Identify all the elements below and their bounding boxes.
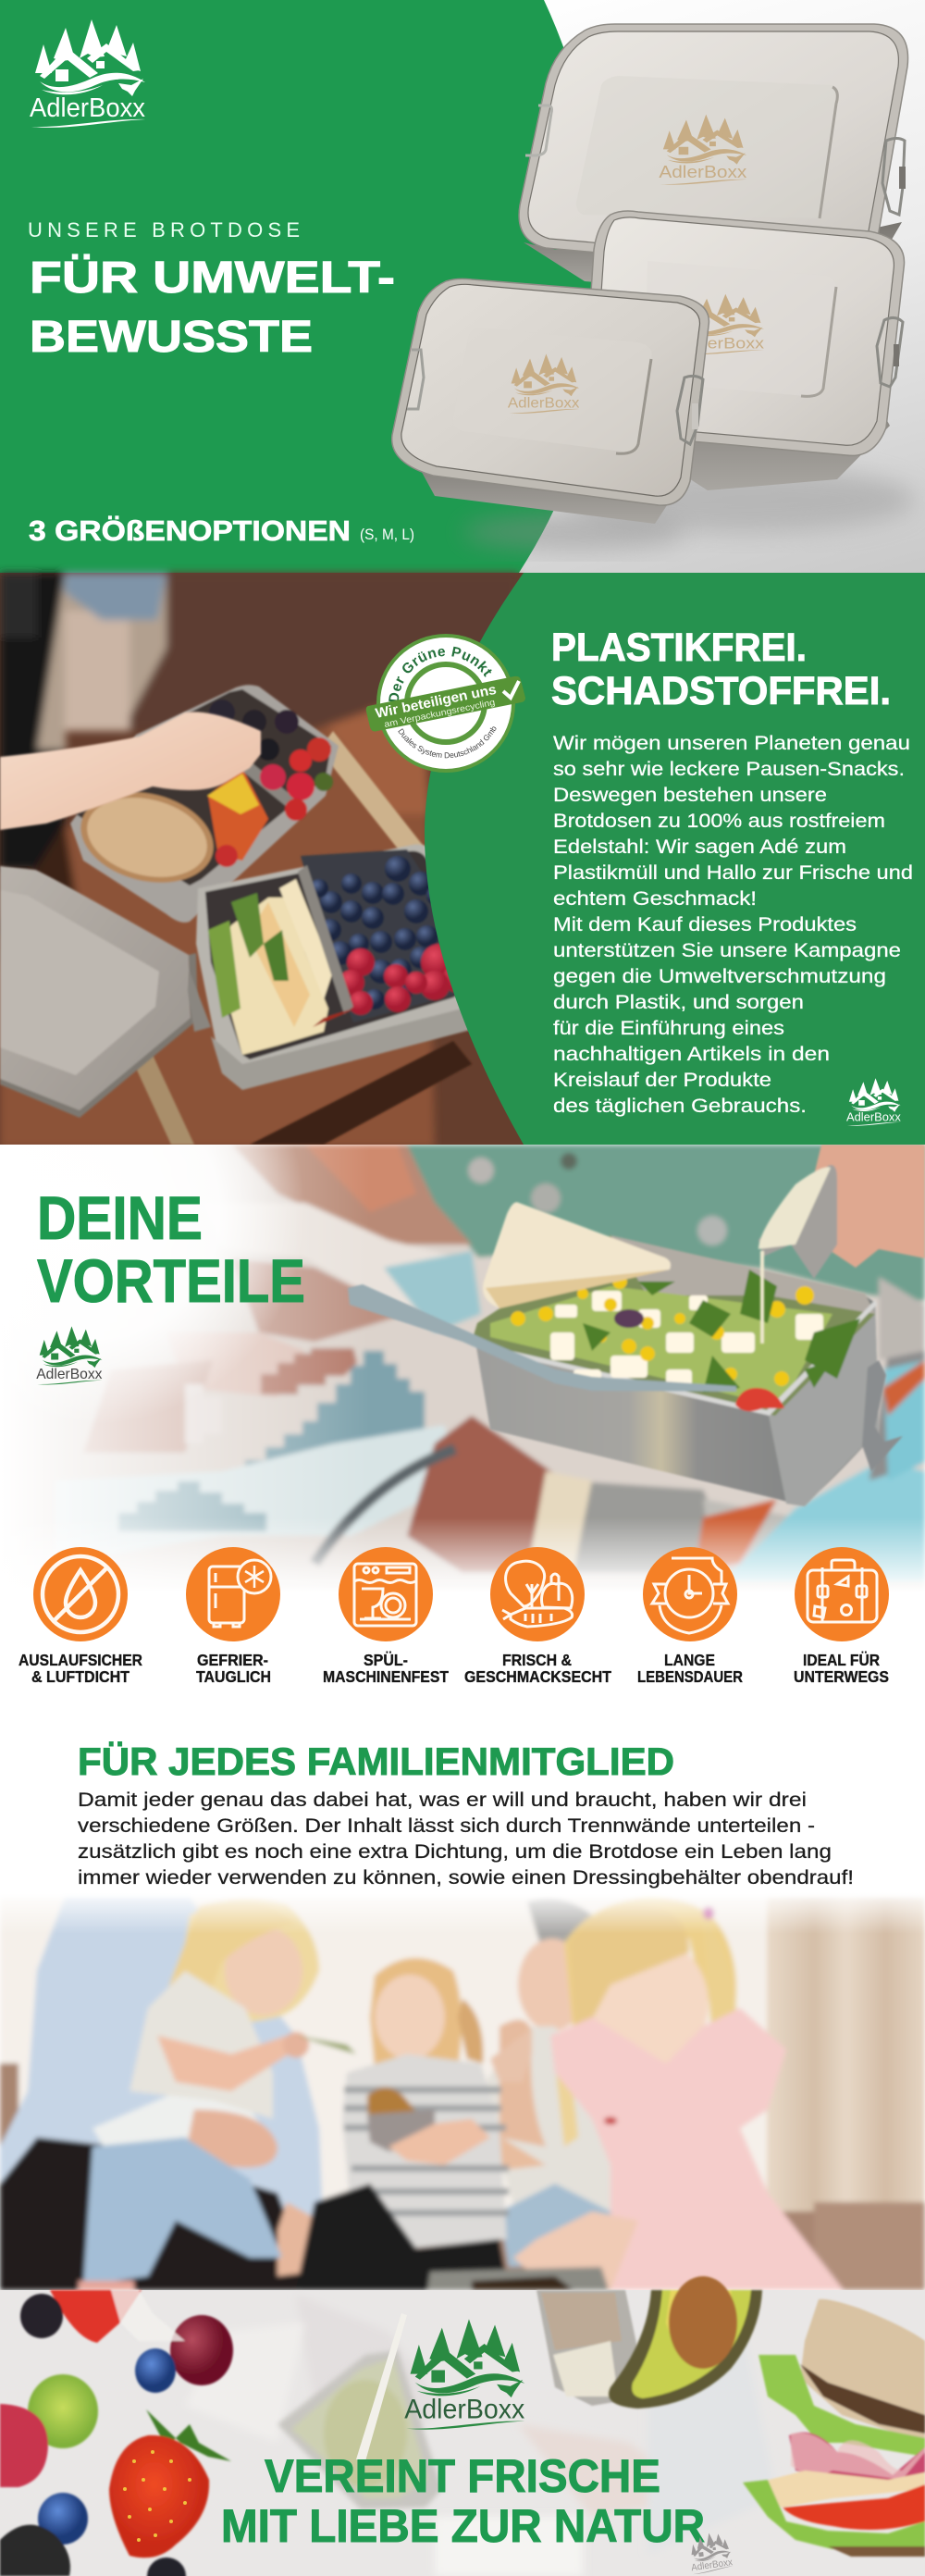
label: SPÜL- xyxy=(364,1651,408,1669)
faded box logo: AdlerBoxx xyxy=(691,2557,734,2573)
text block: Kreislauf der Produkte xyxy=(553,1070,771,1091)
green curved panel xyxy=(425,573,925,1145)
label: UNTERWEGS xyxy=(794,1667,889,1686)
panel: family xyxy=(0,1721,925,2290)
fruit xyxy=(0,2290,233,2576)
logo on medium box: AdlerBoxx xyxy=(681,335,765,352)
badge: Der Grüne Punkt: Der Grüne Punkt xyxy=(388,646,492,701)
seed dots on strawberry xyxy=(123,2450,191,2542)
label: LEBENSDAUER xyxy=(637,1667,743,1686)
panel: benefits xyxy=(0,1145,925,1682)
hero title: BEWUSSTE xyxy=(30,313,313,362)
text block: Damit jeder genau das dabei hat, was er will und braucht, haben wir drei xyxy=(78,1790,807,1811)
text block: durch Plastik, und sorgen xyxy=(553,992,804,1013)
text block: so sehr wie leckere Pausen-Snacks. xyxy=(553,759,905,780)
faded blanket background xyxy=(185,2295,777,2576)
icon: dishwasher xyxy=(339,1547,433,1641)
text block xyxy=(78,1790,854,1889)
logo: AdlerBoxx white xyxy=(30,19,145,128)
ribbon xyxy=(366,676,525,731)
text block: Brotdosen zu 100% aus rostfreiem xyxy=(553,811,885,832)
heading: VEREINT FRISCHE xyxy=(265,2450,660,2502)
product photo: three lunch boxes xyxy=(392,24,916,551)
text block: immer wieder verwenden zu können, sowie einen Dressingbehälter obendrauf! xyxy=(78,1867,854,1889)
label: GEFRIER- xyxy=(197,1651,268,1669)
back lunch box xyxy=(70,685,339,923)
logo on small box xyxy=(508,354,580,414)
fork xyxy=(356,2313,407,2461)
text block: echtem Geschmack! xyxy=(553,888,757,910)
badge: Der Grüne Punkt xyxy=(366,634,525,773)
salad box xyxy=(278,2350,442,2509)
label: GESCHMACKSECHT xyxy=(464,1667,611,1686)
girl in front xyxy=(564,1897,736,2036)
logo: small white: AdlerBoxx xyxy=(846,1110,901,1123)
text block: verschiedene Größen. Der Inhalt lässt sich durch Trennwände unterteilen - xyxy=(78,1815,815,1837)
text block: gegen die Umweltverschmutzung xyxy=(553,966,886,987)
panel: closing banner xyxy=(0,2276,925,2576)
label: AUSLAUFSICHER xyxy=(18,1651,142,1669)
small box xyxy=(413,444,689,524)
logo: AdlerBoxx white: AdlerBoxx xyxy=(30,93,145,123)
large box xyxy=(524,222,902,287)
lunch box with salad xyxy=(348,1202,903,1506)
father xyxy=(0,1897,324,2239)
text block: Edelstahl: Wir sagen Adé zum xyxy=(553,836,846,858)
dress xyxy=(398,1145,925,1301)
text block: für die Einführung eines xyxy=(553,1018,784,1039)
front lunch box xyxy=(188,844,505,1090)
green curved background xyxy=(0,0,603,573)
text block: Plastikmüll und Hallo zur Frische und xyxy=(553,862,913,884)
heading: DEINE xyxy=(37,1183,203,1252)
label xyxy=(324,1651,449,1682)
label: MASCHINENFEST xyxy=(323,1667,449,1686)
fades xyxy=(0,1145,350,1580)
mother xyxy=(527,1899,610,2026)
heading: SCHADSTOFFREI. xyxy=(551,669,891,713)
icon: vegetables xyxy=(490,1547,585,1641)
logo on large box: AdlerBoxx xyxy=(659,162,747,181)
icon: suitcase xyxy=(795,1547,889,1641)
text block: Mit dem Kauf dieses Produktes xyxy=(553,914,857,935)
label xyxy=(794,1651,889,1686)
heading xyxy=(551,625,891,713)
spoon xyxy=(348,1284,736,1392)
text block: nachhaltigen Artikels in den xyxy=(553,1044,830,1065)
suitcase strap and handle xyxy=(319,731,435,874)
logo on medium box xyxy=(681,294,765,354)
logo: small green xyxy=(36,1326,102,1384)
small box with bread xyxy=(536,2290,648,2406)
medium box xyxy=(592,370,890,490)
hero title xyxy=(30,254,395,362)
icon: clock shield xyxy=(643,1547,737,1641)
text block xyxy=(553,733,913,1117)
child arm xyxy=(0,712,261,830)
text block: unterstützen Sie unsere Kampagne xyxy=(553,940,901,961)
small lunch box xyxy=(367,2087,418,2114)
label: FRISCH & xyxy=(502,1651,572,1669)
child middle xyxy=(370,1958,462,2068)
heading: MIT LIEBE ZUR NATUR xyxy=(221,2500,705,2552)
label xyxy=(637,1651,743,1686)
text block: Wir mögen unseren Planeten genau xyxy=(553,733,910,754)
faded box logo xyxy=(686,2531,734,2575)
hand and cup xyxy=(758,1145,925,1344)
blueberries xyxy=(310,856,461,1009)
logo on small box: AdlerBoxx xyxy=(508,394,580,411)
open lid xyxy=(0,866,198,1118)
logo on large box xyxy=(659,115,747,185)
heading: PLASTIKFREI. xyxy=(551,625,807,670)
badge: Der Grüne Punkt: Wir beteiligen uns xyxy=(374,682,498,722)
logo: small green: AdlerBoxx xyxy=(36,1366,102,1382)
heading xyxy=(37,1196,303,1303)
label: TAUGLICH xyxy=(196,1667,271,1686)
badge: Der Grüne Punkt: Duales System Deutschland GmbH xyxy=(398,726,496,759)
hero title: FÜR UMWELT- xyxy=(30,254,395,303)
photo: family xyxy=(0,1888,925,2290)
label xyxy=(464,1651,611,1686)
panel: hero xyxy=(0,0,925,573)
size options: 3 GRÖßENOPTIONEN xyxy=(29,514,351,547)
zigzag: teal peak xyxy=(243,1348,427,1468)
label xyxy=(196,1654,270,1682)
text block: zusätzlich gibt es noch eine extra Dichtung, um die Brotdose ein Leben lang xyxy=(78,1841,832,1863)
logo: centered green: AdlerBoxx xyxy=(404,2395,524,2424)
photo: salad box on blanket xyxy=(54,1145,925,1584)
blanket upper xyxy=(231,1145,472,1245)
photo: children and lunch boxes on a suitcase xyxy=(0,573,574,1147)
icon: no leak xyxy=(33,1547,128,1641)
raspberries xyxy=(339,944,476,1015)
logo: centered green xyxy=(404,2319,524,2430)
label: LANGE xyxy=(664,1651,715,1669)
avocado xyxy=(609,2276,762,2409)
badge: Der Grüne Punkt: am Verpackungsrecycling xyxy=(383,698,496,730)
label: IDEAL FÜR xyxy=(803,1651,880,1669)
icon: freezer xyxy=(186,1547,280,1641)
panel: plastic free xyxy=(0,566,925,1145)
label: & LUFTDICHT xyxy=(31,1667,130,1686)
bread xyxy=(483,1202,671,1308)
eyebrow text: UNSERE BROTDOSE xyxy=(28,218,300,242)
zigzag: salmon xyxy=(261,1348,357,1394)
sandwich xyxy=(743,2299,925,2557)
heading xyxy=(221,2450,705,2552)
child on lap xyxy=(176,1898,319,2024)
heading: VORTEILE xyxy=(37,1246,305,1315)
text block: Deswegen bestehen unsere xyxy=(553,785,827,806)
label xyxy=(18,1654,142,1682)
logo: small white xyxy=(846,1078,901,1126)
size options: (S, M, L) xyxy=(360,526,414,543)
heading: FÜR JEDES FAMILIENMITGLIED xyxy=(78,1740,674,1783)
text block: des täglichen Gebrauchs. xyxy=(553,1096,807,1117)
